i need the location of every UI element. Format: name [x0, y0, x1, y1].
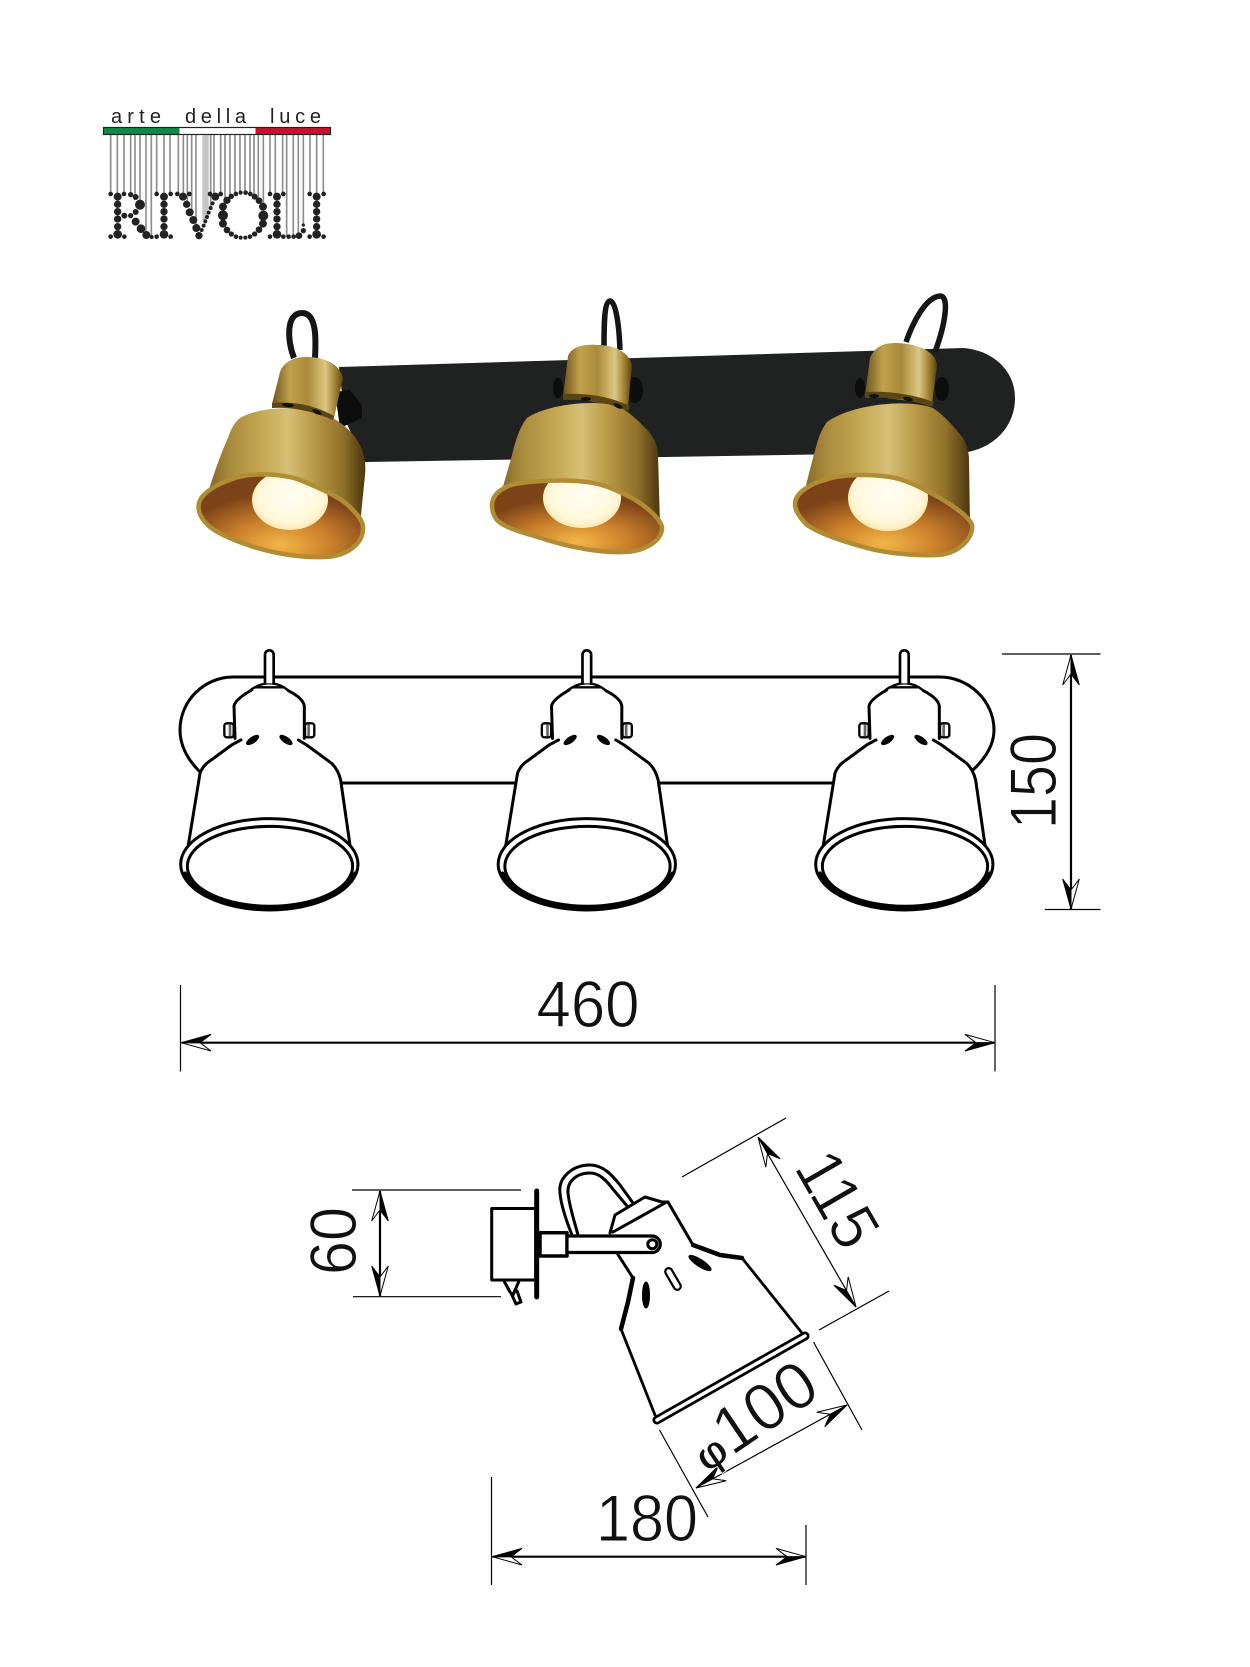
dimension: width 460 [180, 967, 995, 1072]
front lamp 3 [816, 650, 993, 910]
label 60: 60 [296, 1207, 370, 1275]
front lamp 1 [181, 650, 358, 910]
dimension: diameter 100 [660, 1342, 862, 1517]
dimension: height 150 [996, 654, 1100, 910]
label 460: 460 [536, 967, 640, 1041]
black mounting bar [339, 348, 1015, 462]
logo: Rivoli [104, 106, 330, 239]
dimension: 60 [296, 1190, 521, 1297]
label diameter 100: φ100 [673, 1345, 831, 1485]
logo tricolor bar [104, 128, 330, 134]
dimension: 115 [682, 1118, 895, 1330]
cord loop [560, 1165, 633, 1235]
wall plate and box [492, 1191, 537, 1297]
logo tagline: arte [111, 106, 161, 128]
lamp 3 [795, 296, 972, 555]
label 180: 180 [596, 1481, 698, 1555]
logo wordmark of dots and hanging lines [109, 135, 326, 239]
shade rim [657, 1336, 805, 1420]
shade [610, 1197, 805, 1420]
lamp 2 [492, 301, 662, 552]
product photo: three-spot wall lamp [199, 296, 1015, 557]
front lamp 2 [498, 650, 675, 910]
label 150: 150 [996, 733, 1070, 829]
pivot arm [540, 1233, 660, 1256]
switch [504, 1281, 521, 1304]
lamp 1 [199, 313, 365, 557]
mounting plate outline [180, 677, 994, 772]
dimension: 180 [492, 1477, 806, 1585]
logo tagline: luce [270, 106, 321, 128]
front view line drawing [180, 650, 994, 910]
side view line drawing [492, 1165, 805, 1420]
logo tagline: della [185, 106, 247, 128]
label 115: 115 [781, 1137, 895, 1261]
shade vents [642, 1253, 713, 1308]
logo tagline [111, 106, 321, 128]
plate lower edges [341, 782, 833, 784]
